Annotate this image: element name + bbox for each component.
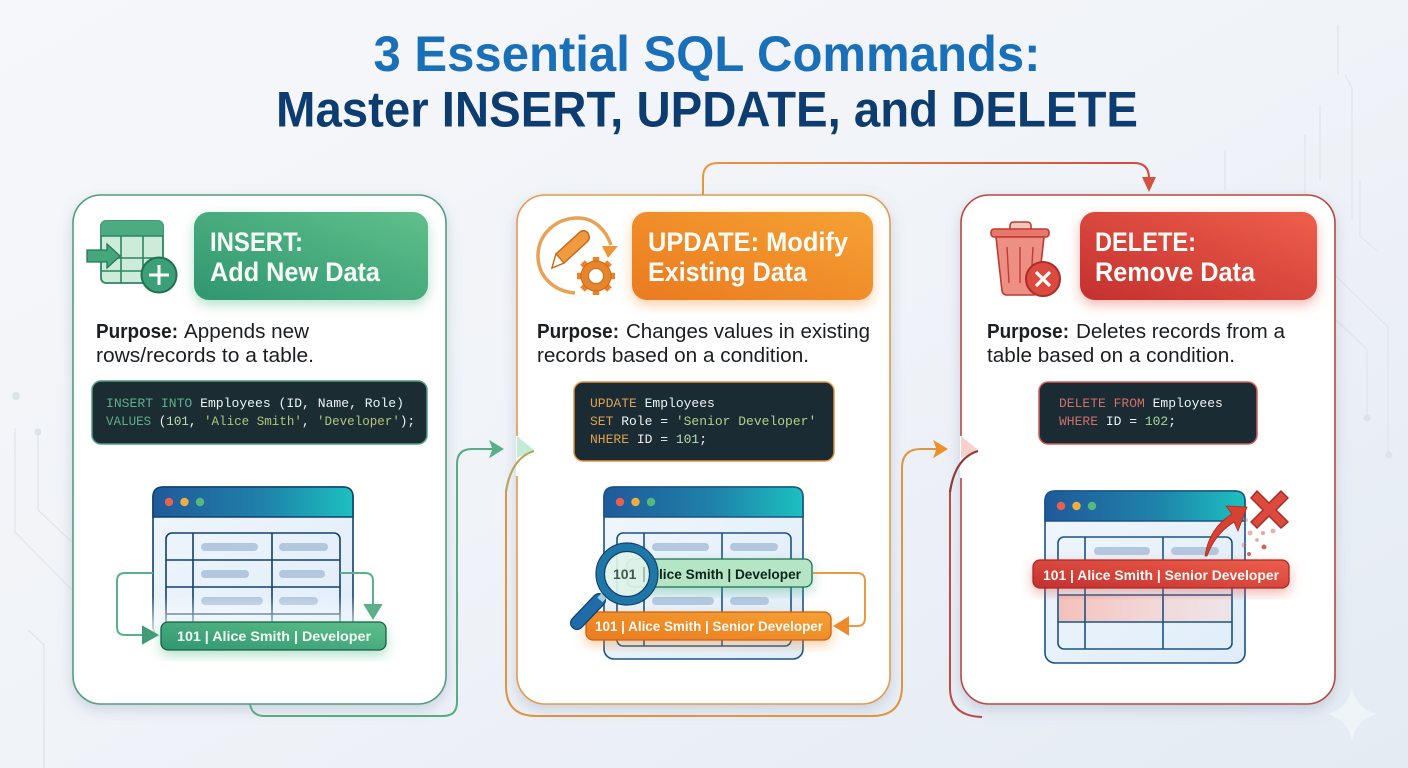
heading: insert: INSERT: <box>210 227 303 257</box>
marker: red triangle and curve <box>950 436 978 492</box>
code: update <box>574 382 834 461</box>
heading: insert <box>194 212 428 300</box>
old row: update <box>627 559 812 587</box>
arrow: row to cross <box>1205 506 1247 556</box>
icon: magnifying glass <box>577 543 658 623</box>
icon: magnifying glass: 101 <box>613 566 637 582</box>
heading: update <box>632 212 873 300</box>
text: delete purpose: Deletes records from a <box>1076 321 1286 343</box>
diagram: update table window <box>604 487 803 659</box>
deleted row: 101 | Alice Smith | Senior Developer <box>1043 567 1280 583</box>
text: delete purpose: Purpose: <box>987 321 1069 343</box>
code: insert <box>92 381 427 444</box>
text: update purpose: records based on a condition. <box>537 345 809 367</box>
arrow: source row left <box>117 573 157 643</box>
text: update purpose: Changes values in existing <box>626 321 870 343</box>
code: delete: WHERE ID = 102; <box>1059 414 1176 429</box>
code: insert: VALUES (101, 'Alice Smith', 'Developer'); <box>106 414 415 429</box>
old row: update: lice Smith | Developer <box>659 566 802 582</box>
new row: update: 101 | Alice Smith | Senior Developer <box>595 618 824 634</box>
heading: delete <box>1080 212 1317 300</box>
marker: green triangle and curve <box>506 436 534 492</box>
heading: insert: Add New Data <box>210 257 381 287</box>
code: update: SET Role = 'Senior Developer' <box>590 414 816 429</box>
icon: trash can <box>991 222 1060 296</box>
code: delete <box>1039 382 1257 444</box>
panel: delete <box>950 195 1335 704</box>
new row: insert <box>161 622 386 650</box>
arrow: old row to new row <box>813 573 865 634</box>
particles <box>1242 518 1276 556</box>
code: update: NHERE ID = 101; <box>590 432 707 447</box>
text: update purpose: Purpose: <box>537 321 619 343</box>
deleted row <box>1033 560 1289 588</box>
code: insert: INSERT INTO Employees (ID, Name, Role) <box>106 396 404 411</box>
code: delete: DELETE FROM Employees <box>1059 396 1223 411</box>
icon: red cross <box>1251 491 1288 528</box>
text: delete purpose: table based on a condition. <box>987 345 1235 367</box>
text: insert purpose: Appends new <box>184 321 310 343</box>
title: 3 Essential SQL Commands: <box>374 26 1040 82</box>
arrow: delete return connector, behind card <box>950 490 982 717</box>
diagram: delete table window <box>1045 491 1245 663</box>
title <box>276 26 1138 138</box>
heading: delete: Remove Data <box>1095 257 1256 287</box>
arrow: top connector from update to delete <box>703 163 1156 195</box>
text: insert purpose: Purpose: <box>96 321 178 343</box>
arrow: update to delete connector, behind card <box>506 441 947 716</box>
text: insert purpose: rows/records to a table. <box>96 345 314 367</box>
heading: update: UPDATE: Modify <box>648 227 848 257</box>
diagram: insert table window <box>150 487 356 641</box>
code: update: UPDATE Employees <box>590 396 715 411</box>
title: Master INSERT, UPDATE, and DELETE <box>276 82 1138 138</box>
arrow: insert to update connector, behind card <box>250 441 503 716</box>
heading: update: Existing Data <box>648 257 808 287</box>
icon: pencil and gear <box>538 218 618 295</box>
arrow: source row right <box>340 573 381 618</box>
heading: delete: DELETE: <box>1095 227 1196 257</box>
decorative sparkle <box>1328 688 1376 741</box>
icon: table with plus <box>87 221 176 292</box>
new row: insert: 101 | Alice Smith | Developer <box>177 628 372 644</box>
panel: update <box>506 195 890 704</box>
new row: update <box>586 612 831 640</box>
panel: insert <box>73 195 446 704</box>
